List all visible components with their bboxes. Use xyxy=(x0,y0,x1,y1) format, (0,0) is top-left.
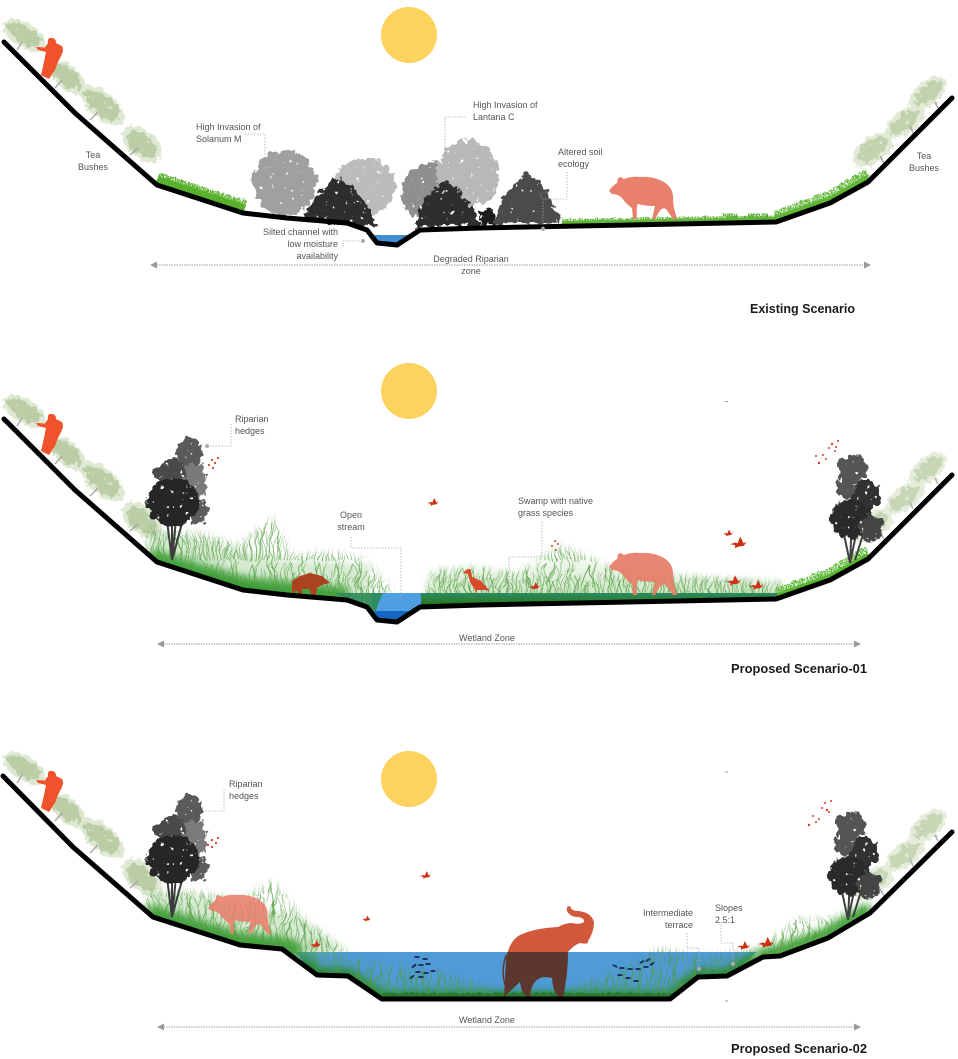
label: open stream: Open xyxy=(340,510,362,520)
fish school left xyxy=(409,956,436,980)
label: altered soil: Altered soil xyxy=(558,147,603,157)
boar xyxy=(292,573,330,595)
label: riparian hedges: Riparian xyxy=(229,779,263,789)
zone arrow xyxy=(150,262,871,268)
riparian tree right xyxy=(828,812,881,920)
zone label: Wetland Zone xyxy=(459,633,515,643)
panel: proposed scenario 01 xyxy=(0,363,953,676)
label: riparian hedges: hedges xyxy=(229,791,259,801)
sun xyxy=(381,363,437,419)
lake bed grass xyxy=(382,993,672,999)
picker xyxy=(36,771,63,812)
leader: riparian hedges xyxy=(205,789,224,811)
fish school right xyxy=(612,958,655,982)
gaur xyxy=(208,895,271,934)
riparian tree right xyxy=(830,455,883,563)
label: silted channel: low moisture xyxy=(287,239,338,249)
leader: riparian hedges xyxy=(205,424,231,448)
label: tea bushes right: Tea xyxy=(917,151,931,161)
zone label: zone xyxy=(461,266,481,276)
heading: Proposed Scenario-01 xyxy=(731,662,867,676)
picker xyxy=(36,414,63,455)
label: intermediate terrace: Intermediate xyxy=(643,908,693,918)
leader: open stream xyxy=(351,537,401,597)
label: altered soil: ecology xyxy=(558,159,590,169)
tall grass right xyxy=(422,541,787,600)
leader: slopes xyxy=(721,925,735,966)
birds xyxy=(427,498,764,590)
bank grass right xyxy=(751,898,876,958)
ibis xyxy=(463,569,490,594)
zone arrow xyxy=(157,640,861,648)
lake water xyxy=(294,952,757,1000)
sun xyxy=(381,751,437,807)
speck xyxy=(725,401,728,402)
heading: Existing Scenario xyxy=(750,302,855,316)
birds xyxy=(310,871,774,950)
tea bushes, right slope xyxy=(847,70,953,174)
riparian tree left xyxy=(147,794,208,917)
bird flocks xyxy=(207,800,832,848)
invasive shrubs xyxy=(254,141,562,227)
label: open stream: stream xyxy=(337,522,365,532)
ground profile xyxy=(3,776,952,999)
tea bushes left xyxy=(0,388,169,546)
label: intermediate terrace: terrace xyxy=(665,920,693,930)
label: silted channel: Silted channel with xyxy=(263,227,338,237)
ground profile xyxy=(4,42,952,245)
label: tea bushes left: Bushes xyxy=(78,162,109,172)
leader: intermediate terrace xyxy=(687,933,701,971)
tea bushes, left slope xyxy=(0,12,169,170)
label: solanum: High Invasion of xyxy=(196,122,261,132)
reed shadow at stream xyxy=(335,593,383,613)
swamp band xyxy=(421,593,778,607)
leader: lantana xyxy=(445,117,465,160)
gaur xyxy=(609,553,677,595)
stream water xyxy=(372,235,411,243)
grass left bank xyxy=(142,876,352,960)
tea bushes right xyxy=(847,803,953,907)
bird flocks xyxy=(208,440,839,551)
stream water xyxy=(372,593,425,621)
gaur silhouette xyxy=(609,177,677,219)
label: swamp: grass species xyxy=(518,508,574,518)
zone arrow xyxy=(157,1024,861,1030)
label: swamp: Swamp with native xyxy=(518,496,593,506)
specks xyxy=(725,772,728,1001)
heading: Proposed Scenario-02 xyxy=(731,1042,867,1056)
label: slopes: Slopes xyxy=(715,903,743,913)
tea bushes right xyxy=(847,446,953,550)
label: lantana: Lantana C xyxy=(473,112,515,122)
label: silted channel: availability xyxy=(296,251,338,261)
riparian tree left xyxy=(147,437,208,560)
ground profile xyxy=(4,419,952,622)
sun xyxy=(381,7,437,63)
elephant xyxy=(503,906,594,998)
leader: swamp xyxy=(509,522,542,595)
tea bushes left xyxy=(0,745,169,903)
zone label: Degraded Riparian xyxy=(433,254,509,264)
label: slopes: 2.5:1 xyxy=(715,915,735,925)
label: tea bushes right: Bushes xyxy=(909,163,940,173)
panel: proposed scenario 02 xyxy=(0,745,953,1056)
label: tea bushes left: Tea xyxy=(86,150,100,160)
label: riparian hedges: Riparian xyxy=(235,414,269,424)
grass strips xyxy=(158,174,868,223)
bank grass right xyxy=(778,552,868,596)
leader: altered soil xyxy=(541,172,567,231)
label: riparian hedges: hedges xyxy=(235,426,265,436)
label: lantana: High Invasion of xyxy=(473,100,538,110)
tall grass left bank xyxy=(142,513,395,608)
leader: solanum xyxy=(245,134,265,158)
label: solanum: Solanum M xyxy=(196,134,242,144)
tea picker figure xyxy=(36,38,63,79)
panel: existing scenario xyxy=(0,7,953,316)
leader: silted channel xyxy=(343,239,365,247)
zone label: Wetland Zone xyxy=(459,1015,515,1025)
submerged grass xyxy=(296,945,760,996)
